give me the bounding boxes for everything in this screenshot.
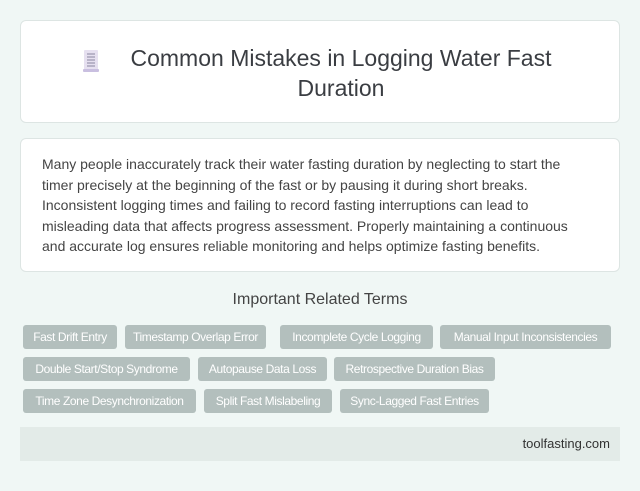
description card (20, 138, 620, 272)
icon: document (83, 50, 99, 72)
terms tags: Sync-Lagged Fast Entries (350, 394, 479, 408)
terms tags: Fast Drift Entry (33, 330, 107, 344)
header card (20, 20, 620, 123)
description text: Many people inaccurately track their water fasting duration by neglecting to start the timer precisely at the beginning of the fast or by pausing it during short breaks. Inconsistent logging times and failing to record fasting interruptions can lead to misleading data that affects progress assessment. Properly maintaining a continuous and accurate log ensures reliable monitoring and helps optimize fasting benefits. (42, 156, 568, 254)
footer text: toolfasting.com (523, 436, 610, 451)
terms tags: Manual Input Inconsistencies (454, 330, 597, 344)
title: Common Mistakes in Logging Water Fast Duration (130, 45, 551, 101)
terms tags: Retrospective Duration Bias (346, 362, 483, 376)
terms heading: Important Related Terms (233, 291, 407, 308)
terms tags: Double Start/Stop Syndrome (35, 362, 178, 376)
terms tags: Autopause Data Loss (209, 362, 316, 376)
terms tags: Split Fast Mislabeling (216, 394, 320, 408)
footer (20, 427, 620, 461)
terms tags: Incomplete Cycle Logging (292, 330, 421, 344)
terms tags: Timestamp Overlap Error (133, 330, 258, 344)
terms tags: Time Zone Desynchronization (35, 394, 184, 408)
